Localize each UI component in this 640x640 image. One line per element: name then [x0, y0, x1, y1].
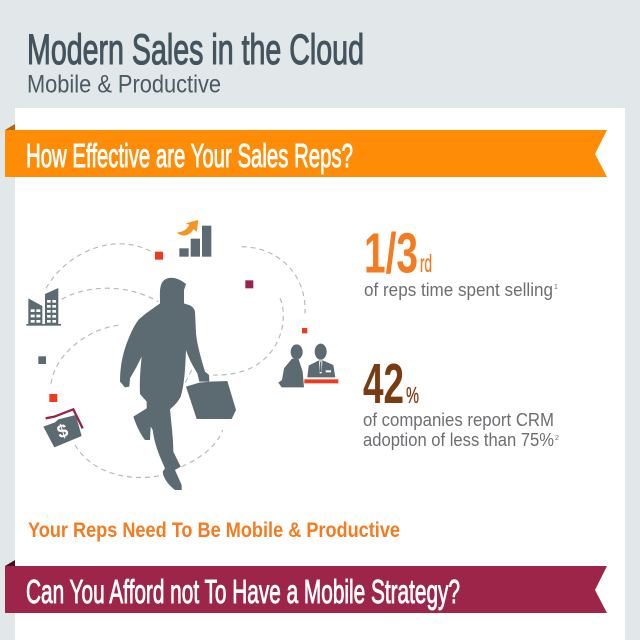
stat: 42%: adoption of less than 75% [363, 429, 554, 450]
title: Modern Sales in the Cloud [27, 26, 364, 74]
dashed paths [46, 244, 305, 477]
illustration: mobile salesman [26, 220, 338, 477]
orange ribbon banner [5, 124, 607, 177]
icon: money folder [43, 409, 83, 447]
icon: buildings [26, 288, 61, 326]
stat: 1/3rd: 1/3 [364, 222, 418, 286]
stat: 1/3rd: rd [420, 250, 432, 278]
icon: money folder: $ [54, 419, 71, 442]
small squares [38, 252, 307, 402]
maroon ribbon banner [5, 560, 607, 613]
stat: 42%: of companies report CRM [363, 409, 554, 430]
callout: mobile and productive: Your Reps Need To Be Mobile & Productive [28, 519, 400, 542]
icon: bar chart with arrow [177, 220, 211, 257]
stat: 42% [363, 352, 559, 450]
stat: 1/3rd: of reps time spent selling [364, 279, 553, 300]
silhouette of walking man [120, 278, 236, 490]
subtitle: Mobile & Productive [27, 70, 221, 98]
stat: 1/3rd [364, 222, 558, 300]
stat: 1/3rd: 1 [554, 284, 558, 291]
icon: two business people [278, 344, 338, 387]
stat: 42%: 42 [363, 352, 404, 416]
briefcase [186, 381, 236, 419]
white panel [15, 108, 625, 640]
banner heading: sales reps: How Effective are Your Sales Reps? [26, 137, 353, 174]
stat: 42%: % [406, 382, 419, 408]
stat: 42%: 2 [555, 435, 559, 442]
